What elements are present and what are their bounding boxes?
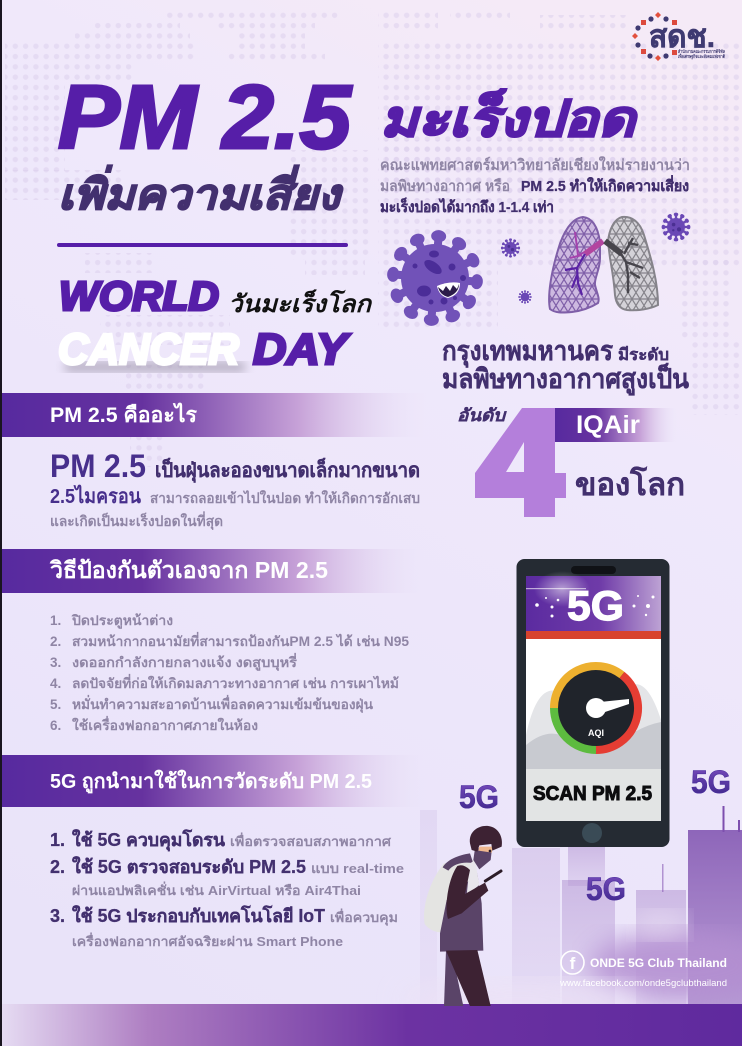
section heading: วิธีป้องกันตัวเองจาก PM 2.5	[49, 557, 328, 583]
title: lung cancer: มะเร็งปอด	[380, 88, 638, 147]
icon: small virus A	[501, 238, 520, 258]
5G use list: 3.	[50, 906, 65, 926]
World Cancer Day heading	[58, 273, 373, 374]
icon: small virus C	[662, 213, 690, 241]
icon: facebook	[561, 951, 584, 974]
screen white	[526, 576, 661, 821]
5G use list: เพื่อควบคุม	[330, 908, 398, 926]
5G label left: 5G	[459, 779, 499, 815]
line 2 normal: มลพิษทางอากาศ หรือ	[380, 177, 510, 195]
left lung	[549, 217, 603, 313]
flare	[534, 571, 590, 607]
section header band	[2, 549, 426, 593]
AQI gauge: AQI	[588, 728, 604, 738]
5G use list: 2.	[50, 857, 65, 877]
IQAir label: IQAir	[576, 411, 640, 439]
phone notch	[571, 566, 616, 574]
Facebook credit	[559, 951, 727, 989]
protection list: ลดปัจจัยที่ก่อให้เกิดมลภาวะทางอากาศ เช่น การเผาไหม้	[72, 673, 399, 691]
page name: ONDE 5G Club Thailand	[590, 958, 727, 970]
logo	[632, 12, 725, 61]
person with mask using phone	[424, 826, 502, 1006]
icon: lungs	[549, 217, 658, 313]
phone	[516, 559, 670, 847]
protection list: 6.	[50, 718, 61, 733]
icon: large virus	[387, 230, 483, 326]
city skyline	[400, 806, 742, 1020]
right lung	[605, 217, 658, 310]
panel: what is PM 2.5	[2, 393, 426, 530]
smog hills	[526, 672, 661, 769]
screen header	[526, 576, 661, 631]
dotted world map backdrop	[5, 10, 742, 467]
title: PM 2.5: PM 2.5	[58, 68, 353, 168]
5G use list: 1.	[50, 830, 65, 850]
WORLD: WORLD	[59, 273, 219, 319]
section heading: 5G ถูกนำมาใช้ในการวัดระดับ PM 2.5	[50, 769, 372, 795]
logo ring	[632, 12, 677, 61]
home button	[582, 823, 602, 843]
sparkles	[535, 595, 654, 618]
section header band	[2, 393, 426, 437]
logo subtext: สำนักงานคณะกรรมการดิจิทัล	[678, 48, 725, 54]
section heading: PM 2.5 คืออะไร	[50, 402, 198, 427]
5G use list	[50, 829, 404, 949]
CANCER: CANCER	[58, 325, 239, 374]
rank label: อันดับ	[457, 406, 507, 425]
definition line 2: สามารถลอยเข้าไปในปอด ทำให้เกิดการอักเสบ	[150, 489, 420, 506]
panel: 5G measurement	[2, 755, 426, 949]
line 3: มะเร็งปอดได้มากถึง 1-1.4 เท่า	[380, 197, 554, 216]
logo wordmark: สดช.	[649, 19, 715, 54]
protection list	[50, 613, 409, 733]
5G use list: ผ่านแอปพลิเคชั่น เช่น AirVirtual หรือ Air4Thai	[72, 881, 361, 898]
big number 4	[475, 408, 566, 517]
definition line 3: และเกิดเป็นมะเร็งปอดในที่สุด	[50, 511, 223, 530]
protection list: 3.	[50, 655, 61, 670]
scan label: SCAN PM 2.5	[533, 783, 652, 805]
title rule	[57, 243, 348, 247]
red bar	[526, 631, 661, 639]
protection list: 1.	[50, 613, 61, 628]
scan panel	[526, 769, 661, 821]
5G label center: 5G	[586, 871, 626, 907]
cancer shadow	[65, 362, 245, 372]
IQAir band	[555, 408, 677, 442]
5G screen title: 5G	[567, 582, 624, 629]
icon: facebook: f	[570, 954, 576, 973]
logo subtext	[678, 48, 725, 60]
of the world: ของโลก	[575, 466, 685, 502]
5G use list: ใช้ 5G ตรวจสอบระดับ PM 2.5	[72, 856, 306, 877]
footer band	[0, 1004, 742, 1046]
page URL: www.facebook.com/onde5gclubthailand	[559, 978, 727, 989]
left edge strip	[0, 0, 2, 1046]
5G use list: เพื่อตรวจสอบสภาพอากาศ	[230, 832, 392, 849]
line 1: คณะแพทยศาสตร์มหาวิทยาลัยเชียงใหม่รายงานว่า	[380, 156, 690, 174]
phone body	[516, 559, 670, 847]
AQI gauge	[550, 662, 642, 754]
protection list: 5.	[50, 697, 61, 712]
5G use list: ใช้ 5G ควบคุมโดรน	[72, 829, 226, 852]
protection list: หมั่นทำความสะอาดบ้านเพื่อลดความเข้มข้นของฝุ่น	[72, 694, 374, 713]
title: increase risk: เพิ่มความเสี่ยง	[58, 165, 344, 218]
panel: protection	[2, 549, 426, 733]
5G label right: 5G	[691, 764, 731, 800]
5G use list: แบบ real-time	[311, 861, 404, 876]
line 2 bold: PM 2.5 ทำให้เกิดความเสี่ยง	[521, 175, 689, 195]
DAY: DAY	[253, 325, 351, 374]
Bangkok ranking callout	[442, 336, 689, 517]
protection list: งดออกกำลังกายกลางแจ้ง งดสูบบุหรี่	[72, 652, 298, 671]
section header band	[2, 755, 426, 807]
protection list: 2.	[50, 634, 61, 649]
Thai world cancer day: วันมะเร็งโลก	[228, 289, 373, 318]
5G use list: เครื่องฟอกอากาศอัจฉริยะผ่าน Smart Phone	[72, 932, 343, 949]
5G use list: ใช้ 5G ประกอบกับเทคโนโลยี IoT	[72, 905, 325, 926]
logo subtext: เพื่อเศรษฐกิจและสังคมแห่งชาติ	[678, 53, 725, 60]
PM 2.5 lead: PM 2.5	[50, 448, 146, 484]
Bangkok heading: กรุงเทพมหานคร	[442, 336, 613, 368]
intro paragraph	[380, 156, 690, 216]
definition lead: เป็นฝุ่นละอองขนาดเล็กมากขนาด	[155, 457, 420, 483]
protection list: ใช้เครื่องฟอกอากาศภายในห้อง	[72, 715, 258, 733]
pollution heading: มลพิษทางอากาศสูงเป็น	[442, 361, 689, 396]
protection list: ปิดประตูหน้าต่าง	[71, 613, 173, 629]
micron: 2.5ไมครอน	[50, 484, 141, 508]
protection list: สวมหน้ากากอนามัยที่สามารถป้องกันPM 2.5 ได้ เช่น N95	[72, 631, 409, 649]
protection list: 4.	[50, 676, 61, 691]
icon: small virus B	[518, 290, 532, 304]
level label: มีระดับ	[618, 345, 669, 364]
